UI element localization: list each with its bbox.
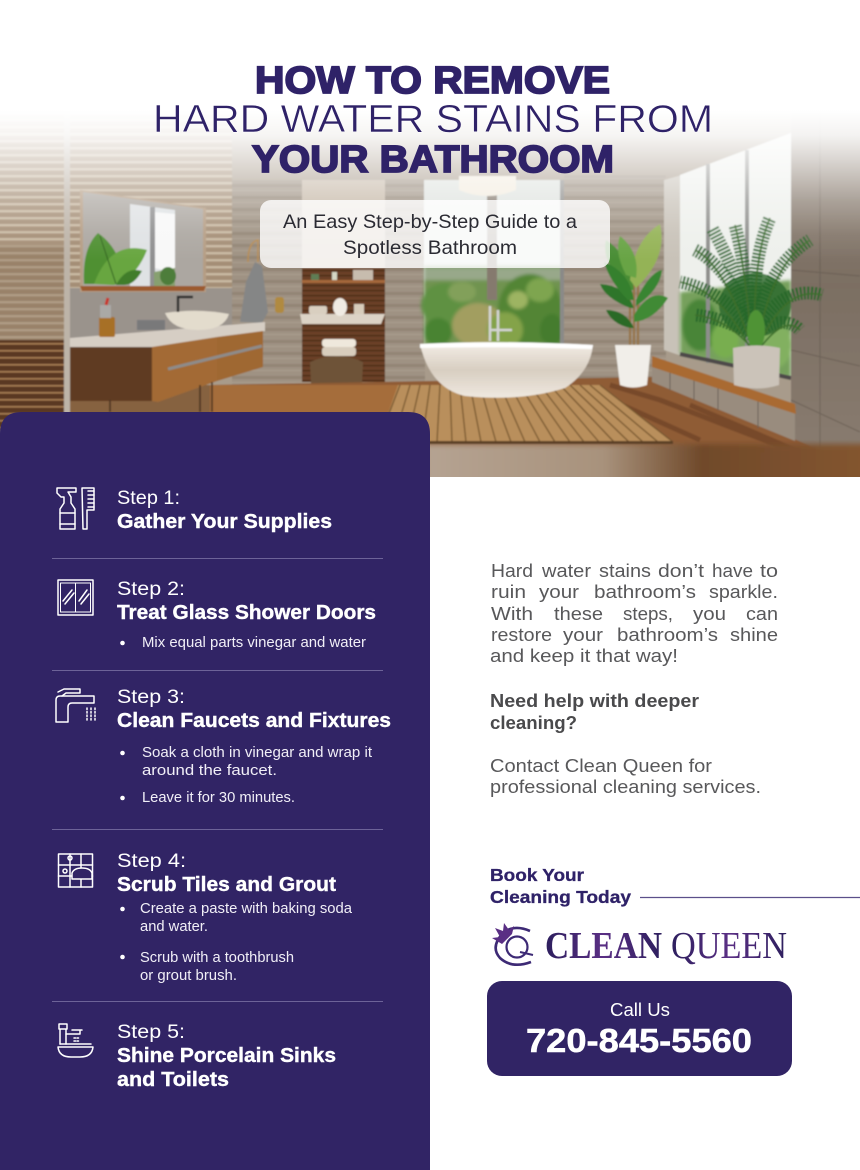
right window — [664, 175, 682, 356]
intro text block: bathroom’s — [617, 625, 718, 645]
intro text block: shine — [730, 625, 778, 645]
title line 1: HOW TO REMOVE — [255, 60, 610, 102]
step 3: Step 3: — [117, 686, 185, 708]
title line 3: YOUR BATHROOM — [252, 139, 614, 181]
logo: Clean Queen: QUEEN — [671, 925, 787, 967]
step 4: Scrub Tiles and Grout — [117, 874, 336, 896]
tub faucet — [490, 306, 512, 341]
window sill — [652, 356, 796, 414]
white planter — [615, 345, 651, 388]
call button — [487, 981, 792, 1076]
intro text block: With — [491, 604, 533, 624]
book your cleaning heading: Book Your — [490, 865, 584, 885]
step 3 — [56, 686, 391, 806]
back wall — [0, 128, 792, 432]
intro text block: Hard — [491, 561, 533, 581]
step 4 — [58, 850, 353, 984]
intro text block: can — [746, 604, 778, 624]
vessel sink — [165, 311, 229, 330]
step 4: or grout brush. — [140, 968, 237, 984]
book your cleaning heading — [490, 865, 860, 907]
contact text block: professional cleaning services. — [490, 777, 761, 797]
palm plant right — [680, 218, 822, 350]
intro text block: your — [539, 582, 579, 602]
column and towel wall — [232, 180, 304, 387]
lower wall beneath sill — [652, 366, 795, 441]
intro text block: have — [712, 561, 753, 581]
intro text block: your — [563, 625, 603, 645]
intro text block: water — [541, 561, 591, 581]
wood niche — [302, 180, 385, 268]
beige planter — [733, 346, 780, 388]
step 4: Create a paste with baking soda — [140, 901, 353, 917]
title line 2: HARD WATER STAINS FROM — [153, 98, 713, 141]
woven pouf — [310, 356, 364, 384]
towel — [240, 262, 268, 323]
icon: glass shower doors — [58, 580, 93, 615]
wall with plant — [564, 175, 666, 387]
right wall — [790, 158, 860, 446]
intro text block: and keep it that way! — [490, 646, 678, 666]
step 4: and water. — [140, 919, 208, 935]
step 1 — [57, 487, 332, 533]
icon: porcelain sink — [58, 1024, 93, 1057]
step 5 — [58, 1021, 336, 1091]
icon: spray bottle and brush — [57, 488, 94, 529]
intro text block: restore — [491, 625, 552, 645]
tap fittings — [137, 320, 165, 330]
mirror — [80, 190, 206, 292]
panel: steps — [0, 412, 430, 1170]
step 1: Step 1: — [117, 487, 180, 509]
step 3: Soak a cloth in vinegar and wrap it — [142, 745, 372, 761]
intro text block: ruin — [491, 582, 526, 602]
help text block — [490, 691, 699, 733]
pendant lamp — [459, 176, 516, 196]
logo: Clean Queen: CLEAN — [545, 925, 662, 967]
wooden bath mat — [378, 385, 673, 444]
help text block: cleaning? — [490, 713, 577, 733]
call button: Call Us — [610, 999, 670, 1020]
bathroom photo — [0, 124, 860, 477]
stack of towels — [322, 339, 356, 347]
bathtub — [420, 342, 593, 398]
step 3: Leave it for 30 minutes. — [142, 790, 295, 806]
potted plant left — [600, 224, 668, 347]
intro text block: don’t — [658, 561, 704, 581]
intro text block: you — [693, 604, 726, 624]
call button: 720-845-5560 — [526, 1022, 752, 1059]
logo: Clean Queen — [492, 923, 787, 967]
upper slats over mirror — [70, 155, 232, 288]
icon: crowned Q — [492, 923, 533, 965]
contact text block — [490, 756, 761, 797]
step 2: Mix equal parts vinegar and water — [142, 635, 366, 651]
subtitle box: Spotless Bathroom — [343, 237, 517, 259]
step 2: Treat Glass Shower Doors — [117, 602, 376, 624]
white top fade — [0, 0, 860, 260]
wall between windows — [385, 178, 425, 386]
step 4: Step 4: — [117, 850, 186, 872]
step 5: Step 5: — [117, 1021, 185, 1043]
contact text block: Contact Clean Queen for — [490, 756, 712, 776]
intro text block: stains — [599, 561, 651, 581]
intro text block: to — [760, 561, 778, 581]
book your cleaning heading: Cleaning Today — [490, 887, 631, 907]
cup and tooth brushes — [99, 317, 115, 337]
subtitle box — [260, 200, 610, 268]
centre window — [424, 180, 564, 350]
intro text block: these — [554, 604, 603, 624]
step 5: and Toilets — [117, 1069, 229, 1091]
intro text block: bathroom’s — [594, 582, 696, 602]
step 1: Gather Your Supplies — [117, 511, 332, 533]
step 3: around the faucet. — [142, 763, 277, 779]
vanity — [70, 322, 265, 347]
slatted left wall — [0, 155, 64, 338]
step 2: Step 2: — [117, 578, 185, 600]
step 4: Scrub with a toothbrush — [140, 950, 294, 966]
icon: tiles and scrub brush — [58, 854, 92, 887]
floor under vanity — [70, 384, 211, 412]
step 5: Shine Porcelain Sinks — [117, 1045, 336, 1067]
concrete splash wall — [70, 288, 232, 338]
step 2 — [58, 578, 376, 651]
icon: faucet — [56, 689, 95, 722]
title — [153, 60, 713, 181]
intro text block: sparkle. — [709, 582, 778, 602]
help text block: Need help with deeper — [490, 691, 699, 711]
subtitle box: An Easy Step-by-Step Guide to a — [283, 211, 577, 233]
intro text block — [490, 561, 778, 666]
floor — [218, 376, 809, 448]
step 3: Clean Faucets and Fixtures — [117, 710, 391, 732]
intro text block: steps, — [623, 604, 673, 624]
